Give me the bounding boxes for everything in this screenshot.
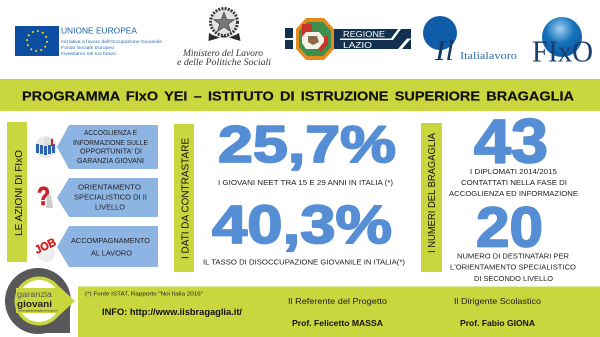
- action 1: accoglienza: [35, 125, 158, 169]
- action 3: accompagnamento: ACCOMPAGNAMENTO: [71, 236, 150, 245]
- icon: people group: [35, 136, 57, 158]
- arrow box: [57, 226, 158, 267]
- logo: Regione Lazio: LAZIO: [343, 41, 372, 50]
- logo: garanzia giovani: giovani: [17, 299, 52, 309]
- action 1: accoglienza: ACCOGLIENZA E: [84, 130, 137, 137]
- panel: le azioni di FIxO: LE AZIONI DI FIxO: [13, 150, 25, 236]
- logo: Unione Europea: Fondo Sociale Europeo: [61, 45, 115, 50]
- panel: i dati da contrastare: I DATI DA CONTRASTARE: [180, 138, 192, 259]
- arrow box: [57, 125, 158, 169]
- title: PROGRAMMA FIxO YEI – ISTITUTO DI ISTRUZIONE SUPERIORE BRAGAGLIA: [22, 88, 575, 104]
- logo: Ministero del Lavoro: Ministero del Lavoro: [182, 49, 263, 59]
- action 2: orientamento: LIVELLO: [95, 202, 125, 212]
- panel: le azioni di FIxO: [7, 122, 27, 262]
- stat: 43: ACCOGLIENZA ED INFORMAZIONE: [449, 189, 578, 198]
- panel: i numeri del Bragaglia: [421, 123, 442, 272]
- icon: job: JOB: [33, 237, 58, 257]
- logo: Italia Lavoro: [423, 16, 517, 67]
- logo: Italia Lavoro: Il: [434, 36, 454, 67]
- stat: 20: 20: [476, 196, 543, 260]
- project contact: [288, 296, 387, 328]
- headmaster contact: Il Dirigente Scolastico: [454, 296, 541, 306]
- source note: (*) Fonte ISTAT, Rapporto "Noi Italia 2016": [85, 292, 203, 298]
- headmaster contact: Prof. Fabio GIONA: [460, 318, 535, 328]
- logo: Unione Europea: Investiamo nel tuo futuro: [61, 51, 117, 56]
- stat: 43: CONTATTATI NELLA FASE DI: [461, 178, 567, 187]
- action 2: orientamento: [37, 178, 158, 217]
- stat: 20: [450, 196, 576, 283]
- project contact: Prof. Felicetto MASSA: [292, 318, 383, 328]
- logo: garanzia giovani: www.garanziagiovani.gov.it: [18, 308, 58, 312]
- logo: Regione Lazio: [285, 18, 411, 60]
- action 3: accompagnamento: AL LAVORO: [91, 248, 132, 258]
- icon: question mark: ?: [37, 181, 50, 211]
- stat: 25,7%: 25,7%: [218, 116, 396, 174]
- logo: garanzia giovani: garanzia: [17, 290, 53, 299]
- panel: i dati da contrastare: [174, 124, 194, 272]
- arrow box: [57, 178, 158, 217]
- stat: 25,7%: [218, 116, 396, 187]
- project contact: Il Referente del Progetto: [288, 296, 387, 306]
- panel: footer: [78, 286, 600, 337]
- panel: i numeri del Bragaglia: I NUMERI DEL BRAGAGLIA: [426, 133, 438, 253]
- stat: 43: I DIPLOMATI 2014/2015: [470, 167, 557, 176]
- title banner: [0, 79, 600, 111]
- action 3: accompagnamento: [33, 226, 158, 267]
- logo: Italia Lavoro: Italialavoro: [460, 51, 517, 62]
- logo: Unione Europea: UNIONE EUROPEA: [61, 26, 138, 36]
- action 1: accoglienza: OPPORTUNITA' DI: [80, 148, 142, 156]
- info link: INFO: http://www.iisbragaglia.it/: [102, 307, 242, 318]
- stat: 43: [449, 108, 578, 198]
- logo: FIxO: FIxO: [532, 34, 593, 68]
- stat: 25,7%: I GIOVANI NEET TRA 15 E 29 ANNI IN ITALIA (*): [218, 178, 394, 187]
- logo: Unione Europea: [15, 26, 163, 56]
- logo: Regione Lazio: REGIONE: [343, 30, 386, 39]
- logo: Ministero del Lavoro: e delle Politiche Sociali: [177, 58, 271, 68]
- stat: 43: 43: [474, 108, 548, 176]
- logo: Ministero del Lavoro: [177, 8, 271, 68]
- stat: 40,3%: IL TASSO DI DISOCCUPAZIONE GIOVANILE IN ITALIA(*): [203, 258, 406, 266]
- stat: 20: DI SECONDO LIVELLO: [474, 274, 553, 283]
- stat: 20: L'ORIENTAMENTO SPECIALISTICO: [450, 262, 576, 272]
- logo: garanzia giovani: [5, 268, 75, 334]
- action 1: accoglienza: GARANZIA GIOVANI: [77, 158, 144, 165]
- logo: Unione Europea: Iniziativa a favore dell'Occupazione Giovanile: [61, 39, 163, 44]
- action 2: orientamento: ORIENTAMENTO: [78, 182, 141, 192]
- headmaster contact: [454, 296, 541, 328]
- stat: 40,3%: 40,3%: [212, 195, 392, 255]
- logo: FIxO: [532, 17, 593, 68]
- stat: 40,3%: [203, 195, 406, 266]
- action 1: accoglienza: INFORMAZIONE SULLE: [73, 140, 148, 147]
- stat: 20: NUMERO DI DESTINATARI PER: [457, 252, 570, 260]
- action 2: orientamento: SPECIALISTICO DI II: [74, 192, 147, 202]
